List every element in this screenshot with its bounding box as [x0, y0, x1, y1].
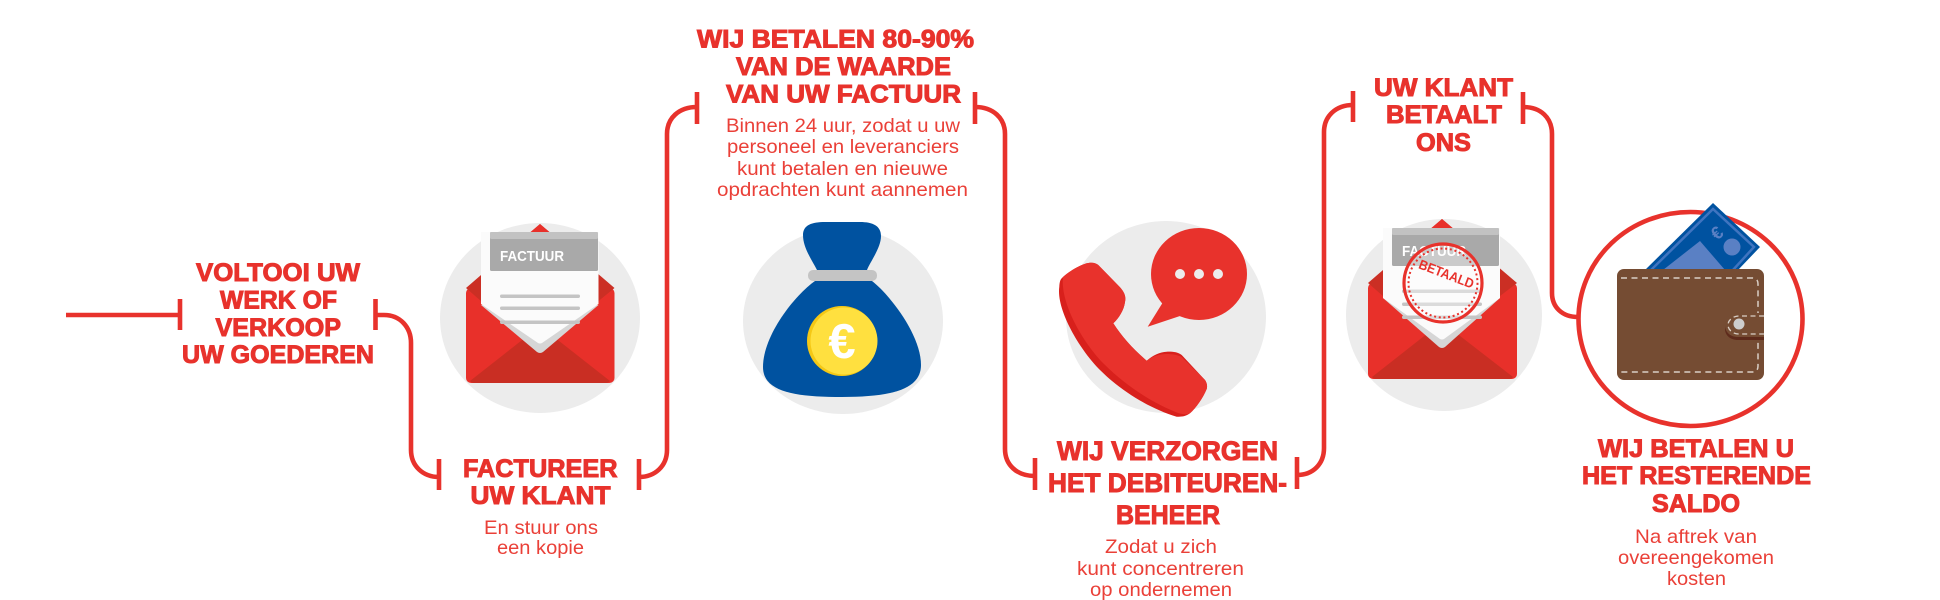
- icon: money bag with euro coin: [743, 222, 943, 414]
- step 6 heading: HET RESTERENDE: [1582, 462, 1811, 490]
- step 2 description: een kopie: [497, 537, 584, 559]
- step 3 heading: VAN UW FACTUUR: [726, 80, 961, 108]
- step 3 description: opdrachten kunt aannemen: [717, 179, 968, 201]
- step 6 description: Na aftrek van: [1635, 526, 1757, 548]
- icon: envelope with paid stamp: BETAALD: [1417, 257, 1476, 292]
- step 6 description: overeengekomen: [1618, 547, 1774, 569]
- step 4 description: Zodat u zich: [1105, 536, 1217, 558]
- step 6 description: [1618, 526, 1774, 590]
- step 4 heading: [1048, 436, 1287, 530]
- icon: telephone and speech bubble: [1059, 221, 1266, 417]
- step 2 description: [484, 517, 598, 559]
- step 2 heading: UW KLANT: [470, 482, 610, 510]
- step 3 description: [717, 115, 968, 201]
- step 3 description: kunt betalen en nieuwe: [737, 158, 948, 180]
- step 3 heading: [697, 26, 974, 108]
- step 3 heading: WIJ BETALEN 80-90%: [697, 26, 974, 54]
- icon: money bag with euro coin: €: [828, 315, 856, 369]
- step 3 description: personeel en leveranciers: [727, 136, 959, 158]
- step 1 heading: UW GOEDEREN: [182, 341, 374, 369]
- step 2 description: En stuur ons: [484, 517, 598, 539]
- step 5 heading: ONS: [1416, 129, 1471, 157]
- step 5 heading: [1374, 74, 1513, 157]
- icon: envelope with invoice: [440, 223, 640, 413]
- step 1 heading: WERK OF: [220, 286, 337, 314]
- step 6 heading: WIJ BETALEN U: [1598, 435, 1794, 463]
- step 1 heading: VERKOOP: [216, 314, 341, 342]
- step 4 heading: WIJ VERZORGEN: [1057, 436, 1278, 466]
- step 1 heading: [182, 259, 374, 369]
- icon: wallet with banknote in circle: [1578, 203, 1802, 426]
- step 2 heading: [463, 455, 618, 510]
- step 2 heading: FACTUREER: [463, 455, 618, 483]
- flow connector line: [66, 91, 1578, 490]
- step 5 heading: UW KLANT: [1374, 74, 1513, 102]
- step 6 heading: [1582, 435, 1811, 518]
- icon: envelope with invoice: FACTUUR: [500, 249, 564, 265]
- step 3 heading: VAN DE WAARDE: [736, 53, 951, 81]
- icon: wallet with banknote in circle: €: [1707, 222, 1727, 244]
- icon: envelope with paid stamp: FACTUUR: [1402, 244, 1466, 260]
- step 6 description: kosten: [1667, 568, 1726, 590]
- step 4 description: [1077, 536, 1244, 600]
- step 4 heading: HET DEBITEUREN-: [1048, 468, 1287, 498]
- step 1 heading: VOLTOOI UW: [196, 259, 360, 287]
- step 5 heading: BETAALT: [1386, 101, 1502, 129]
- step 4 description: kunt concentreren: [1077, 558, 1244, 580]
- icon: envelope with paid stamp: [1346, 219, 1542, 411]
- step 3 description: Binnen 24 uur, zodat u uw: [726, 115, 961, 137]
- step 4 heading: BEHEER: [1116, 500, 1220, 530]
- step 6 heading: SALDO: [1652, 490, 1740, 518]
